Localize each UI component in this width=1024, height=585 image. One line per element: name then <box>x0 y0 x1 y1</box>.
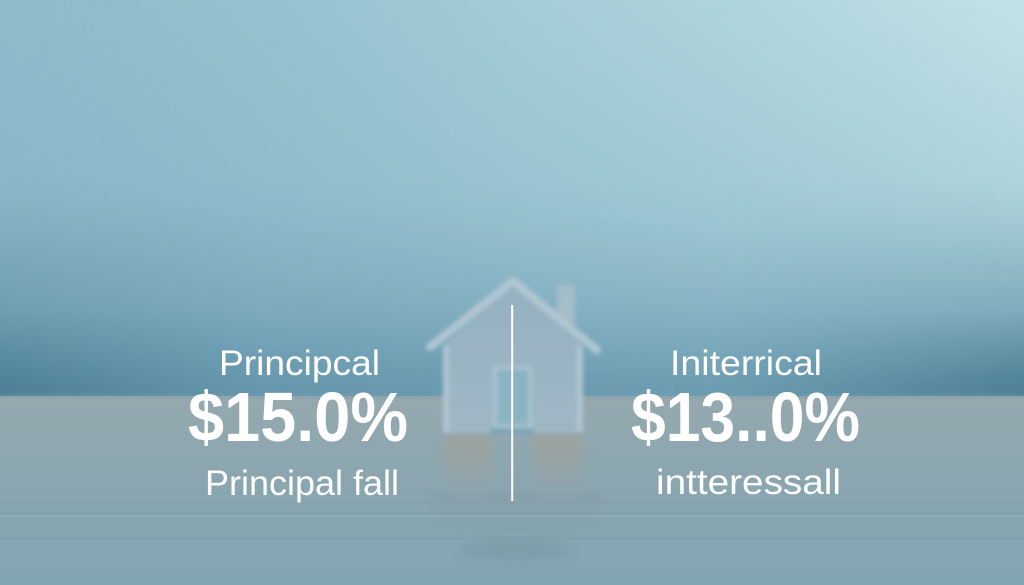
caption: interest: intteressall <box>656 463 841 502</box>
background wall <box>0 0 1024 400</box>
figure: interest value: $13..0% <box>631 378 860 456</box>
house base shadow <box>490 428 534 434</box>
figure: principal value: $15.0% <box>188 378 408 456</box>
house corner trims <box>446 346 580 432</box>
house roof <box>430 281 597 350</box>
divider line <box>511 305 513 501</box>
panel: interest <box>631 344 860 502</box>
house reflection <box>430 434 600 561</box>
panel: principal <box>188 344 408 503</box>
caption: principal fall: Principal fall <box>205 464 399 503</box>
house chimney <box>557 285 575 325</box>
house door opening <box>495 368 530 426</box>
wooden table surface <box>0 394 1024 585</box>
heading: interest: Initerrical <box>670 344 822 383</box>
icon: house <box>430 281 597 434</box>
heading: principal: Principcal <box>219 344 380 383</box>
house body <box>443 285 583 433</box>
